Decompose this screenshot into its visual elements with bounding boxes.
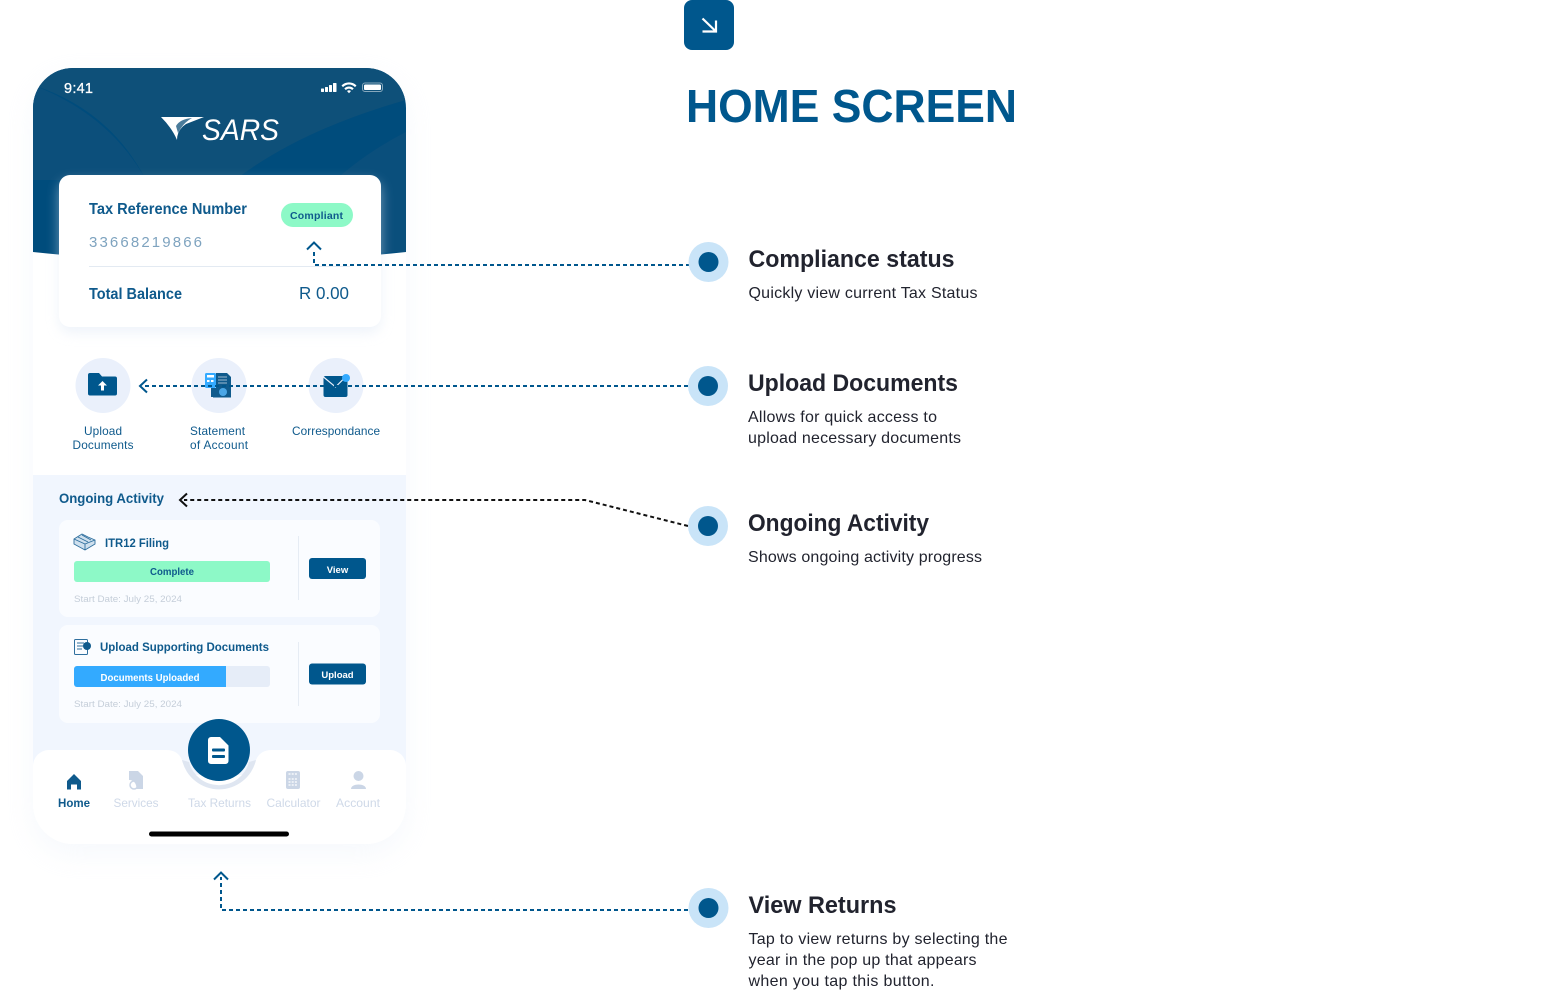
header background (33, 68, 406, 262)
activity card: upload supporting documents: Upload Supporting Documents (100, 640, 269, 654)
quick action: correspondance: Correspondance (292, 424, 380, 438)
SARS logo: SARS (202, 114, 279, 147)
callout: compliance status: Compliance status (748, 246, 954, 273)
upload button: Upload (321, 670, 354, 681)
upload button (309, 664, 366, 684)
nav: services: Services (114, 796, 159, 810)
arrow: ongoing activity connector (180, 494, 688, 526)
callout: upload documents (688, 366, 961, 447)
callout: upload documents: upload necessary documents (748, 430, 961, 447)
title: HOME SCREEN (686, 80, 1017, 132)
activity card: upload supporting documents: Start Date: July 25, 2024 (74, 699, 182, 710)
callout: ongoing activity: Shows ongoing activity progress (748, 549, 982, 566)
activity card: upload supporting documents: Documents Uploaded (100, 673, 200, 684)
status bar: 9:41 (64, 81, 93, 97)
activity card: ITR12 filing: ITR12 Filing (105, 536, 169, 550)
quick action: statement of account: Statement (190, 424, 246, 438)
SARS logo (161, 114, 279, 147)
activity card: ITR12 filing: Start Date: July 25, 2024 (74, 594, 182, 605)
arrow: view returns connector (214, 872, 688, 910)
bottom navigation bar (33, 750, 406, 844)
icon: building (74, 534, 95, 550)
callout: ongoing activity (688, 506, 982, 566)
quick action: upload documents: Upload (84, 424, 122, 438)
quick action: correspondance (292, 358, 380, 438)
nav: services (114, 771, 159, 810)
arrow: compliance status connector (307, 242, 690, 265)
account card: Total Balance (89, 286, 182, 303)
callout: view returns: when you tap this button. (748, 973, 934, 990)
nav: account (336, 771, 381, 810)
icon: document (74, 640, 91, 654)
callout: view returns (688, 888, 1008, 990)
callout: view returns: year in the pop up that appears (748, 952, 976, 969)
nav: calculator (266, 771, 321, 810)
callout: view returns: View Returns (748, 892, 896, 919)
nav: calculator: Calculator (266, 796, 321, 810)
view button: View (327, 565, 349, 576)
ongoing activity heading: Ongoing Activity (59, 490, 164, 506)
account card: Tax Reference Number (89, 201, 247, 218)
arrow: upload documents connector (140, 380, 688, 392)
quick action: statement of account: of Account (190, 438, 249, 452)
callout: compliance status (688, 242, 978, 302)
status bar (64, 81, 382, 97)
home indicator (149, 832, 289, 836)
activity card: upload supporting documents (59, 625, 380, 723)
activity card: ITR12 filing: Complete (150, 567, 194, 578)
account card (59, 175, 381, 333)
callout: upload documents: Allows for quick access to (748, 409, 937, 426)
callout: compliance status: Quickly view current Tax Status (748, 285, 978, 302)
nav: home (58, 774, 90, 810)
callout: ongoing activity: Ongoing Activity (748, 510, 930, 537)
view button (309, 558, 366, 579)
account card: R 0.00 (299, 283, 349, 303)
compliant badge: Compliant (290, 210, 344, 222)
callout: view returns: Tap to view returns by selecting the (748, 931, 1008, 948)
callout: upload documents: Upload Documents (748, 370, 958, 397)
phone mockup (33, 68, 406, 854)
account card: 33668219866 (89, 234, 202, 251)
quick action: upload documents: Documents (72, 438, 134, 452)
quick action: upload documents (72, 358, 134, 452)
nav: home: Home (58, 798, 90, 810)
compliant badge (281, 203, 353, 227)
nav: tax returns: Tax Returns (188, 796, 251, 810)
floating tax returns button (188, 719, 250, 781)
activity card: ITR12 filing (59, 520, 380, 617)
nav: account: Account (336, 796, 381, 810)
quick action: statement of account (190, 358, 249, 452)
icon: arrow badge (684, 0, 734, 50)
